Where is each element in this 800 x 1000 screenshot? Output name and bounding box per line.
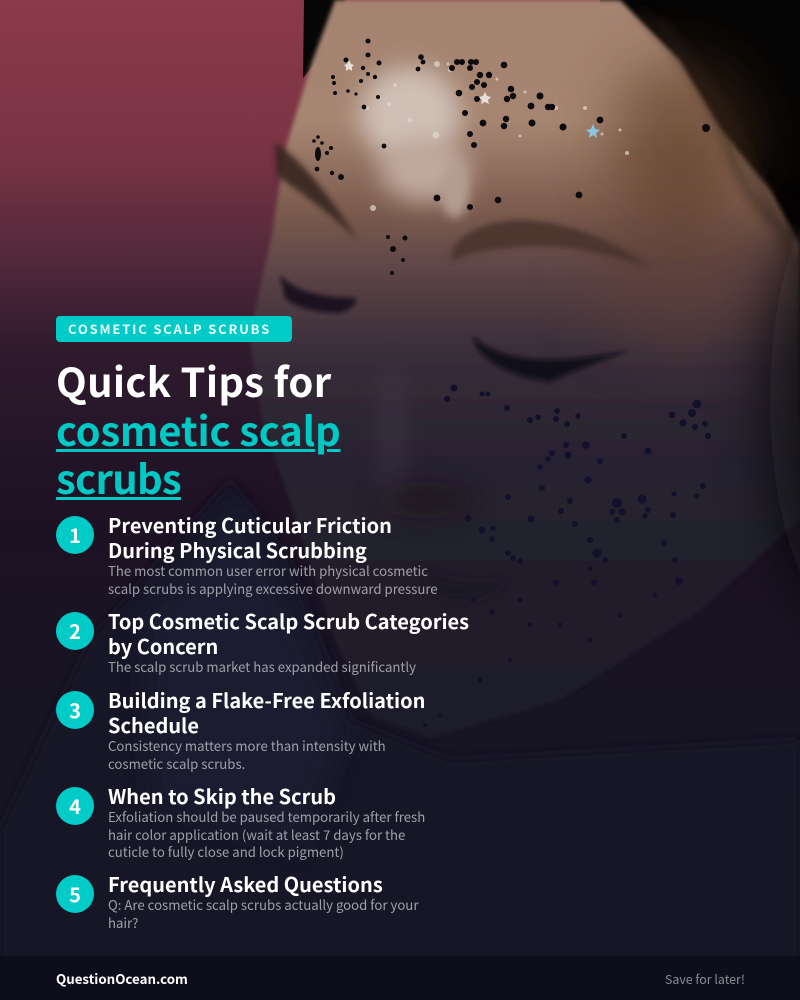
number 2: 2 (69, 616, 81, 645)
tip 3: Building a Flake-Free Exfoliation (108, 685, 425, 714)
tip 3: Schedule (108, 710, 199, 739)
tip 5: Frequently Asked Questions (108, 869, 383, 898)
number 5 (56, 875, 94, 913)
tip 3: Consistency matters more than intensity with (108, 736, 386, 755)
number 2 (56, 612, 94, 650)
tip 5: Q: Are cosmetic scalp scrubs actually good for your (108, 895, 418, 914)
tip 4 (56, 781, 425, 861)
brows (275, 142, 358, 240)
tip 5 (56, 869, 418, 932)
number 1: 1 (69, 520, 81, 549)
hair sliver at left (303, 0, 345, 78)
warm cheek (590, 210, 770, 350)
tip 2 (56, 606, 469, 676)
number 4: 4 (69, 791, 81, 820)
tip 3: cosmetic scalp scrubs. (108, 754, 245, 773)
tip 2: The scalp scrub market has expanded significantly (108, 657, 416, 676)
footer bar (0, 956, 800, 1000)
silver glitter (365, 61, 629, 211)
tip 1: Preventing Cuticular Friction (108, 510, 392, 539)
hair (600, 0, 800, 420)
tip 4: hair color application (wait at least 7 days for the (108, 825, 405, 844)
tip 1: The most common user error with physical cosmetic (108, 561, 428, 580)
face (250, 0, 800, 738)
glitter dots: cheek (423, 384, 711, 727)
tip 2: Top Cosmetic Scalp Scrub Categories (108, 606, 469, 635)
title (56, 351, 341, 506)
tip 4: cuticle to fully close and lock pigment) (108, 842, 344, 861)
title: Quick Tips for (56, 351, 331, 409)
nose and mouth shading (375, 482, 475, 518)
tip 3 (56, 685, 425, 773)
nose bridge highlight (380, 360, 404, 520)
hair wisps (640, 10, 800, 280)
number 3 (56, 691, 94, 729)
tip 2: by Concern (108, 631, 218, 660)
clothing (0, 480, 800, 1000)
title: scrubs (56, 448, 181, 506)
number 3: 3 (69, 695, 81, 724)
tip 1: scalp scrubs is applying excessive downward pressure (108, 579, 438, 598)
category tag: COSMETIC SCALP SCRUBS (68, 319, 271, 338)
tip 5: hair? (108, 913, 138, 932)
number 5: 5 (69, 879, 81, 908)
eyes (280, 275, 356, 313)
number 1 (56, 516, 94, 554)
tip 4: Exfoliation should be paused temporarily after fresh (108, 807, 425, 826)
darker forehead side (610, 60, 750, 220)
category tag (56, 316, 292, 342)
title: cosmetic scalp (56, 400, 341, 458)
glitter patch (360, 67, 460, 163)
stars (586, 124, 600, 138)
site name: QuestionOcean.com (56, 969, 188, 988)
tip 4: When to Skip the Scrub (108, 781, 336, 810)
number 4 (56, 787, 94, 825)
tip 1: During Physical Scrubbing (108, 535, 367, 564)
save note: Save for later! (665, 970, 745, 988)
tip 1 (56, 510, 438, 598)
glitter dots: forehead (312, 38, 710, 275)
